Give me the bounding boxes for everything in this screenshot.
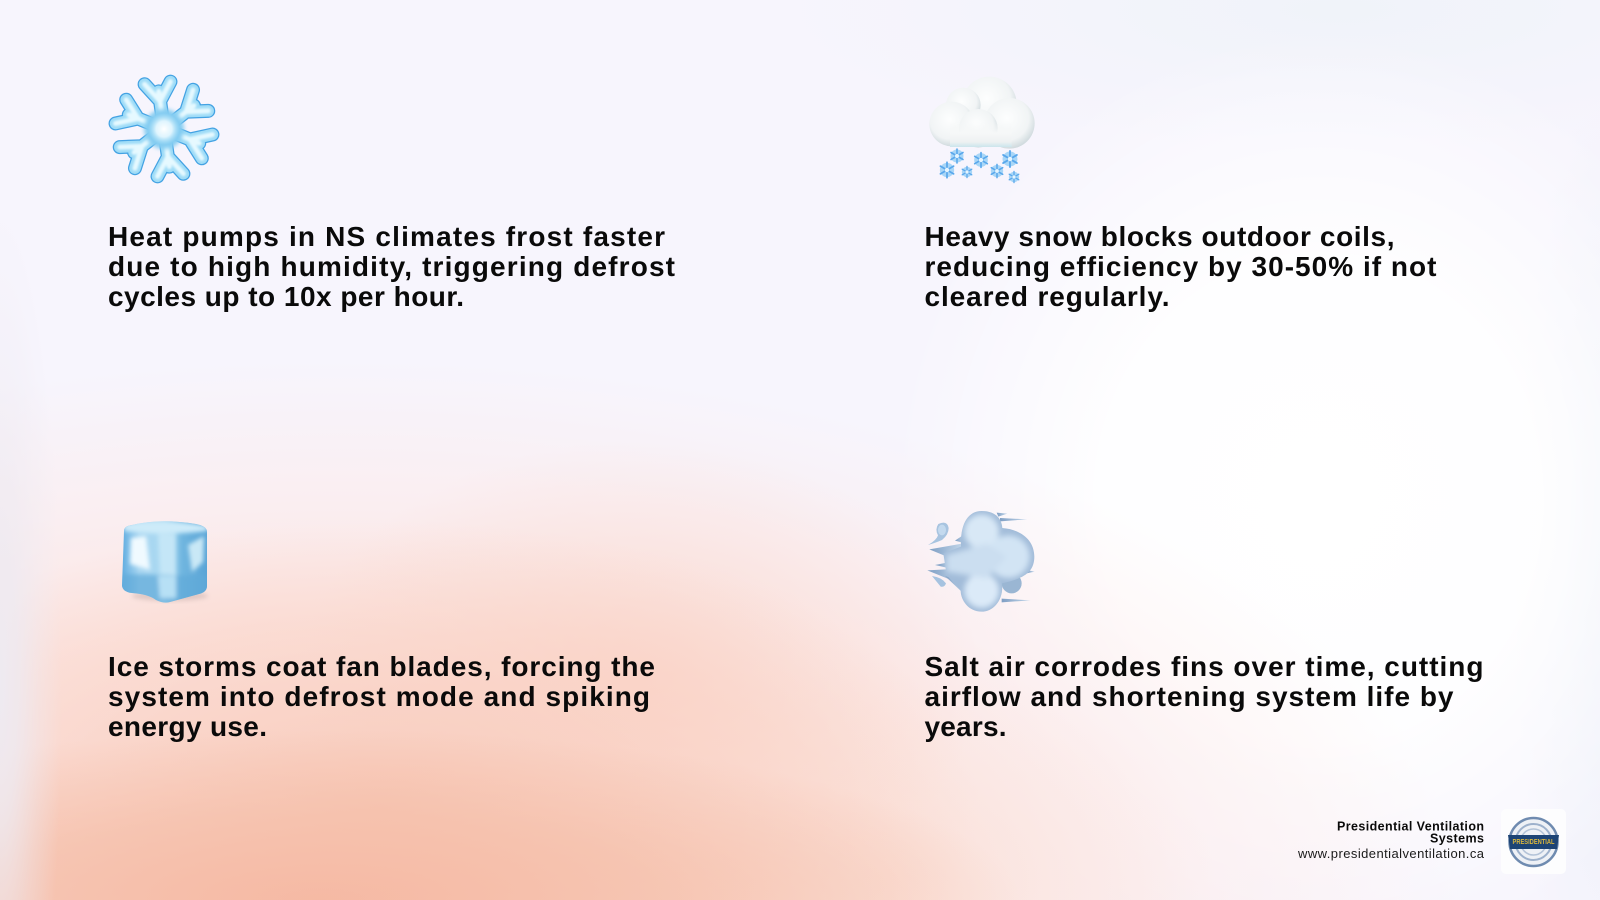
text: frost: Heat pumps in NS climates frost faster: [108, 221, 665, 252]
text: salt air: Salt air corrodes fins over time, cutting: [924, 651, 1484, 682]
footer website: www.presidentialventilation.ca: [1297, 846, 1485, 861]
item 2: snow: [924, 77, 1436, 312]
text: ice: system into defrost mode and spiking: [108, 681, 650, 712]
icon: snowflake: [111, 76, 217, 182]
text: snow: Heavy snow blocks outdoor coils,: [924, 221, 1394, 252]
footer company name: Systems: [1430, 832, 1484, 846]
icon: wind puff: [927, 511, 1035, 612]
icon: ice cube: [122, 521, 208, 604]
footer brand: [1297, 809, 1566, 874]
logo badge: PRESIDENTIAL: [1512, 839, 1555, 846]
footer company name: [1337, 820, 1484, 846]
item 3: ice: [108, 521, 655, 742]
text: snow: reducing efficiency by 30-50% if not: [924, 251, 1436, 282]
item 4: salt air: [924, 511, 1484, 742]
logo badge: [1501, 809, 1566, 874]
text: snow: [924, 221, 1436, 312]
text: salt air: [924, 651, 1484, 742]
text: ice: Ice storms coat fan blades, forcing the: [108, 651, 655, 682]
footer company name: Presidential Ventilation: [1337, 820, 1484, 834]
text: salt air: years.: [924, 711, 1006, 742]
text: snow: cleared regularly.: [924, 281, 1170, 312]
text: ice: energy use.: [108, 711, 267, 742]
icon: cloud with snow: [929, 77, 1035, 183]
item 1: frost: [108, 76, 675, 312]
text: salt air: airflow and shortening system life by: [924, 681, 1454, 712]
text: frost: due to high humidity, triggering defrost: [108, 251, 675, 282]
text: ice: [108, 651, 655, 742]
text: frost: [108, 221, 675, 312]
text: frost: cycles up to 10x per hour.: [108, 281, 464, 312]
